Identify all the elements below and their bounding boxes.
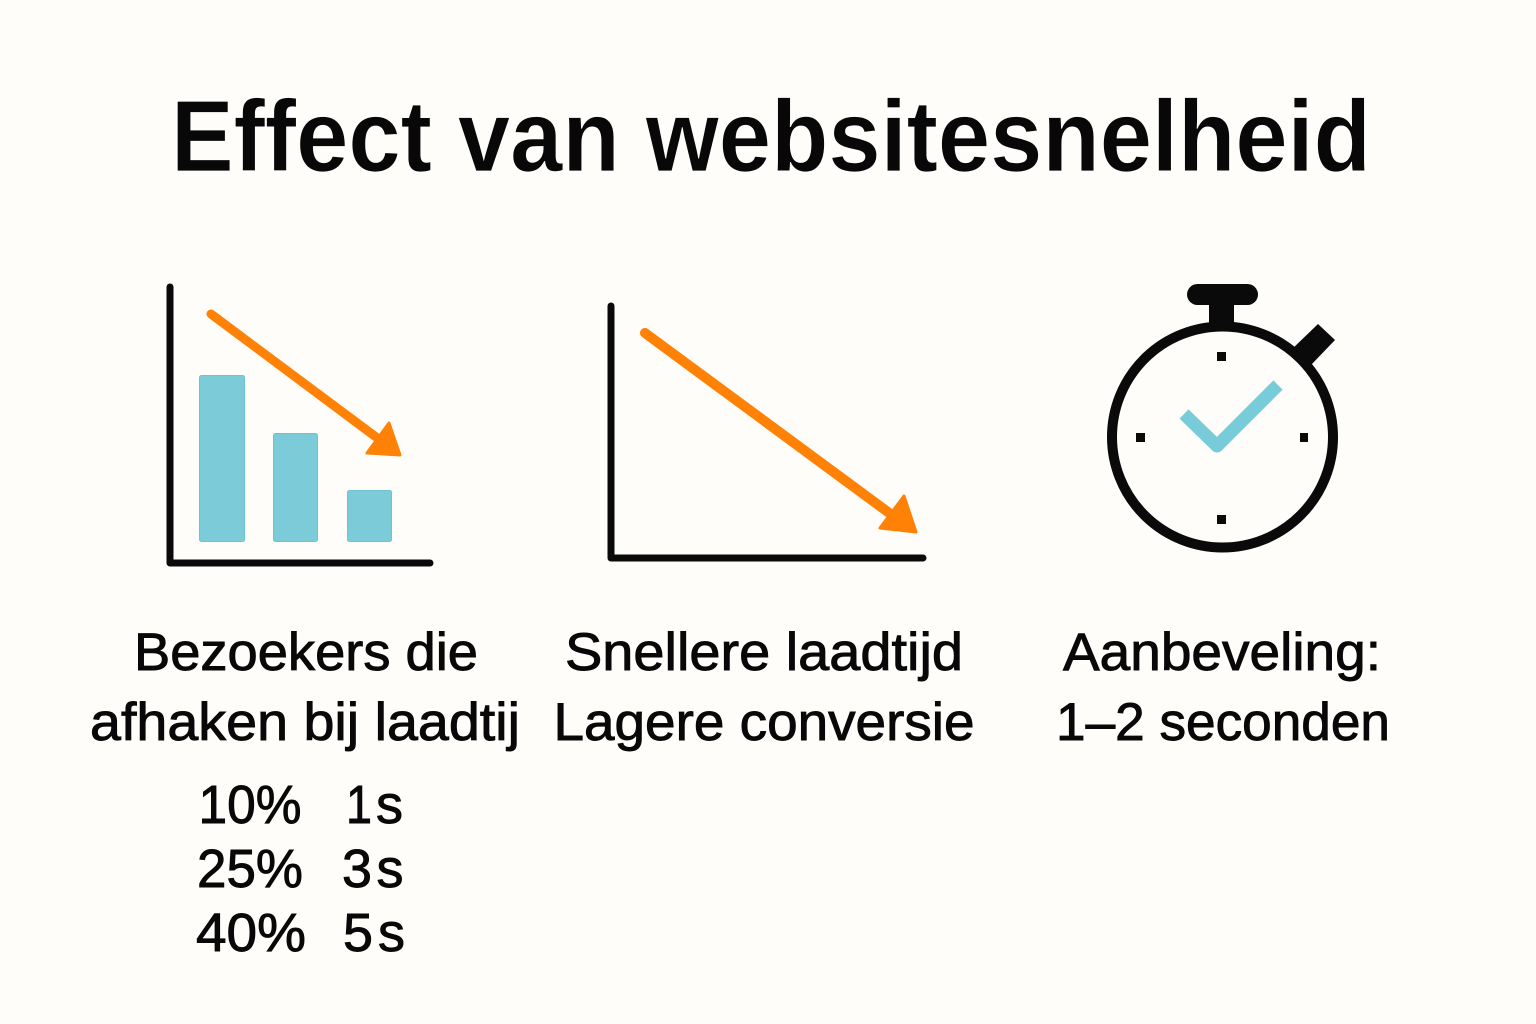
text: recommendation label [1056, 623, 1390, 752]
text: visitor data: 1 [346, 775, 372, 835]
text: visitors label [90, 623, 520, 752]
text: conversion label [554, 623, 974, 752]
text: visitor data: 5 [343, 903, 373, 963]
text: visitor data: s [376, 775, 403, 835]
text: visitors label: Bezoekers die [134, 623, 478, 682]
text: visitors label: afhaken bij laadtij [90, 693, 520, 752]
title: Effect van websitesnelheid [171, 81, 1371, 193]
text: visitor data: 10% [198, 775, 302, 835]
icon: stopwatch with check mark [1112, 284, 1335, 548]
text: visitor data [196, 775, 405, 963]
text: visitor data: s [378, 903, 405, 963]
text: visitor data: 25% [197, 839, 303, 899]
text: visitor data: 3 [342, 839, 372, 899]
text: recommendation label: Aanbeveling: [1063, 623, 1381, 682]
text: visitor data: 40% [196, 903, 306, 963]
chart: falling conversion line [611, 306, 923, 558]
text: conversion label: Lagere conversie [554, 693, 974, 752]
chart: bars with falling arrow [170, 287, 430, 563]
text: visitor data: s [376, 839, 404, 899]
text: recommendation label: 1–2 seconden [1056, 693, 1390, 752]
text: conversion label: Snellere laadtijd [565, 623, 963, 682]
